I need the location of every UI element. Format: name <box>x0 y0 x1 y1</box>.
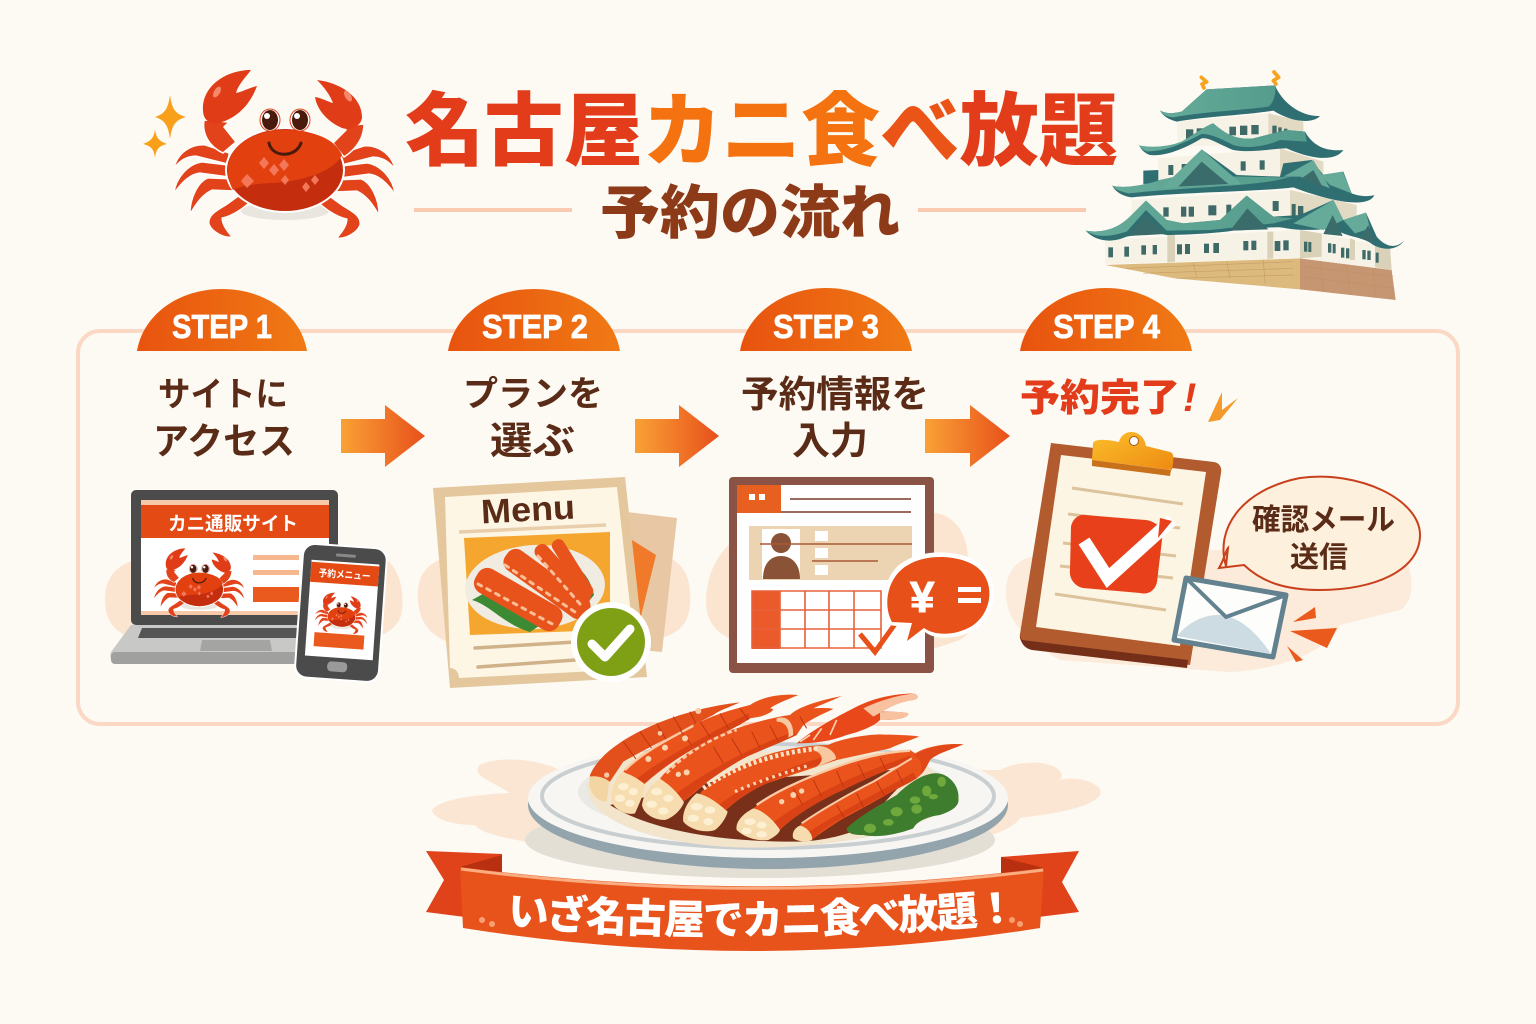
crab claw D <box>797 693 918 743</box>
step 3 heading <box>741 374 929 463</box>
crab leg E <box>683 734 919 831</box>
icon: envelope <box>1174 578 1286 657</box>
crab leg G <box>793 744 963 841</box>
step 1 heading: アクセス <box>153 421 295 462</box>
step 4 heading: 予約完了 <box>1020 378 1180 420</box>
icon: sparkles <box>143 95 186 158</box>
title: 名古屋カニ食べ放題 <box>405 87 1118 176</box>
icon: Nagoya castle <box>1086 72 1404 300</box>
step 2 badge: STEP 2 <box>482 308 588 345</box>
icon: reservation form <box>729 477 934 673</box>
decorative blobs behind plate <box>432 760 1101 850</box>
callout: confirmation email: 確認メール <box>1252 504 1395 537</box>
step 2 badge <box>448 289 620 351</box>
step 3 badge: STEP 3 <box>773 308 879 345</box>
icon: laptop <box>110 490 338 664</box>
icon: laptop: カニ通販サイト <box>168 513 298 535</box>
arrow 3 <box>925 405 1010 467</box>
step 1 badge: STEP 1 <box>172 308 272 345</box>
icon: clipboard <box>1020 432 1221 668</box>
callout: confirmation email: 送信 <box>1290 541 1348 574</box>
step 3 heading: 入力 <box>792 421 868 463</box>
icon: smartphone <box>293 542 389 684</box>
step 3 heading: 予約情報を <box>741 374 929 415</box>
step 4 heading: ! <box>1183 376 1196 420</box>
icon: menu sheet: Menu <box>480 489 576 531</box>
crab leg A <box>589 702 740 802</box>
step 2 heading: プランを <box>463 375 603 414</box>
crab leg C <box>642 696 842 820</box>
panel: steps <box>78 331 1458 724</box>
step 4 heading <box>1020 376 1238 422</box>
crab leg B <box>611 695 798 814</box>
icon: menu sheet <box>433 477 677 688</box>
subtitle <box>414 181 1086 246</box>
icon: yen speech bubble: ¥ <box>910 573 935 622</box>
icon: smartphone: 予約メニュー <box>318 566 371 583</box>
garnish: parsley <box>847 773 959 836</box>
illustration: crab leg plate <box>525 693 1008 878</box>
banner ribbon <box>426 851 1079 951</box>
arrow 1 <box>341 405 425 467</box>
step 4 badge <box>1020 288 1192 351</box>
callout: confirmation email <box>1219 477 1420 590</box>
icon: yen speech bubble <box>884 552 994 648</box>
step 2 heading <box>463 375 603 463</box>
step 1 heading <box>153 376 295 462</box>
icon: sparks <box>1287 607 1337 662</box>
step 2 heading: 選ぶ <box>490 421 575 463</box>
banner ribbon: いざ名古屋でカニ食べ放題！ <box>512 891 1002 938</box>
step 3 badge <box>740 288 912 351</box>
main crab illustration <box>174 70 395 238</box>
step 1 badge <box>137 289 307 351</box>
arrow 2 <box>635 405 719 467</box>
step 1 heading: サイトに <box>158 376 288 414</box>
step 4 badge: STEP 4 <box>1053 308 1161 345</box>
crab leg F <box>736 750 920 840</box>
decorative peach blobs: step illustrations <box>105 512 1411 672</box>
subtitle: 予約の流れ <box>600 181 900 246</box>
